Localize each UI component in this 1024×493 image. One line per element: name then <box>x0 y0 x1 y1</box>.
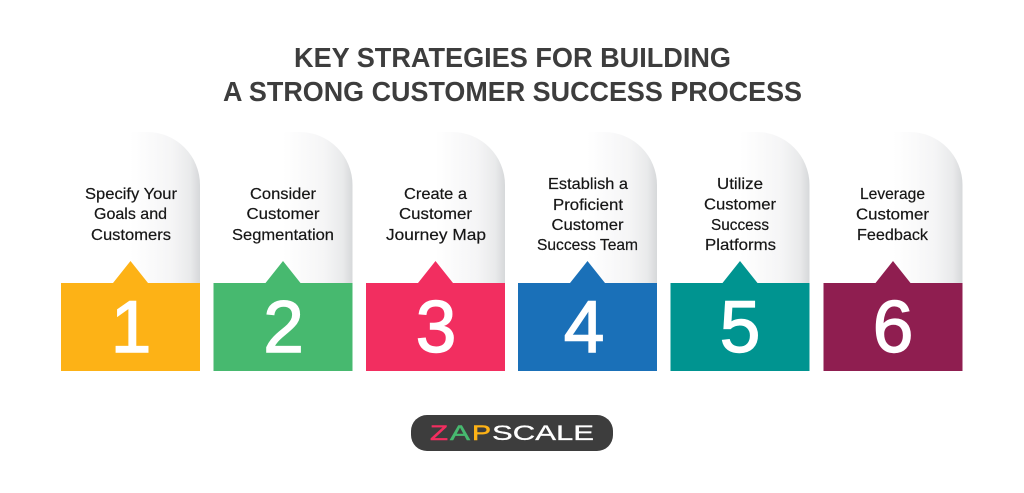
step 4 label <box>537 176 638 254</box>
step 3 number block <box>366 261 505 371</box>
logo: ZapScale: A <box>450 422 470 445</box>
step 3 number: 3 <box>416 287 456 368</box>
step 1 label: Specify Your <box>85 186 178 203</box>
step 6 label: Customer <box>856 206 930 224</box>
step 5 number: 5 <box>720 287 760 368</box>
step 4 label: Success Team <box>537 237 638 254</box>
logo: ZapScale: Z <box>430 422 448 445</box>
step 1 label: Goals and <box>94 206 167 223</box>
step 1 number: 1 <box>111 287 151 368</box>
panel: step 2 <box>214 132 352 371</box>
step 6 label: Leverage <box>860 186 925 203</box>
step 3 label: Create a <box>404 186 467 203</box>
step 5 label: Success <box>711 217 769 234</box>
step 5 label: Utilize <box>717 176 763 193</box>
step 3 label: Customer <box>399 206 473 223</box>
panel: step 6 <box>824 132 962 371</box>
step 1 label: Customers <box>91 227 171 244</box>
step 2 label: Customer <box>246 206 320 223</box>
step 5 number block <box>670 261 810 371</box>
step 3 label: Journey Map <box>386 227 486 244</box>
step 2 label: Consider <box>250 186 317 203</box>
panel: step 1 <box>61 132 200 371</box>
step 5 label <box>704 176 777 254</box>
logo: ZapScale <box>411 415 613 451</box>
step 6 number: 6 <box>873 287 913 368</box>
step 5 label: Platforms <box>705 237 776 254</box>
step 2 label <box>232 186 334 244</box>
step 1 number block <box>61 261 200 371</box>
title <box>223 42 802 107</box>
step 4 label: Customer <box>552 217 624 234</box>
step 2 number block <box>214 261 352 371</box>
logo: ZapScale: P <box>472 422 491 445</box>
step 4 label: Proficient <box>553 197 624 214</box>
logo: ZapScale: SCALE <box>492 422 594 445</box>
step 1 label <box>85 186 178 244</box>
step 2 label: Segmentation <box>232 227 334 244</box>
panel: step 5 <box>670 132 810 371</box>
panel: step 4 <box>518 132 657 371</box>
step 6 number block <box>824 261 962 371</box>
step 3 label <box>386 186 486 244</box>
title: A STRONG CUSTOMER SUCCESS PROCESS <box>223 76 802 107</box>
step 5 label: Customer <box>704 196 777 214</box>
title: KEY STRATEGIES FOR BUILDING <box>294 42 731 73</box>
step 2 number: 2 <box>263 287 304 368</box>
step 4 label: Establish a <box>548 176 628 193</box>
step 6 label: Feedback <box>857 227 929 244</box>
step 4 number block <box>518 261 657 371</box>
step 4 number: 4 <box>564 287 604 368</box>
step 6 label <box>856 186 930 244</box>
panel: step 3 <box>366 132 505 371</box>
